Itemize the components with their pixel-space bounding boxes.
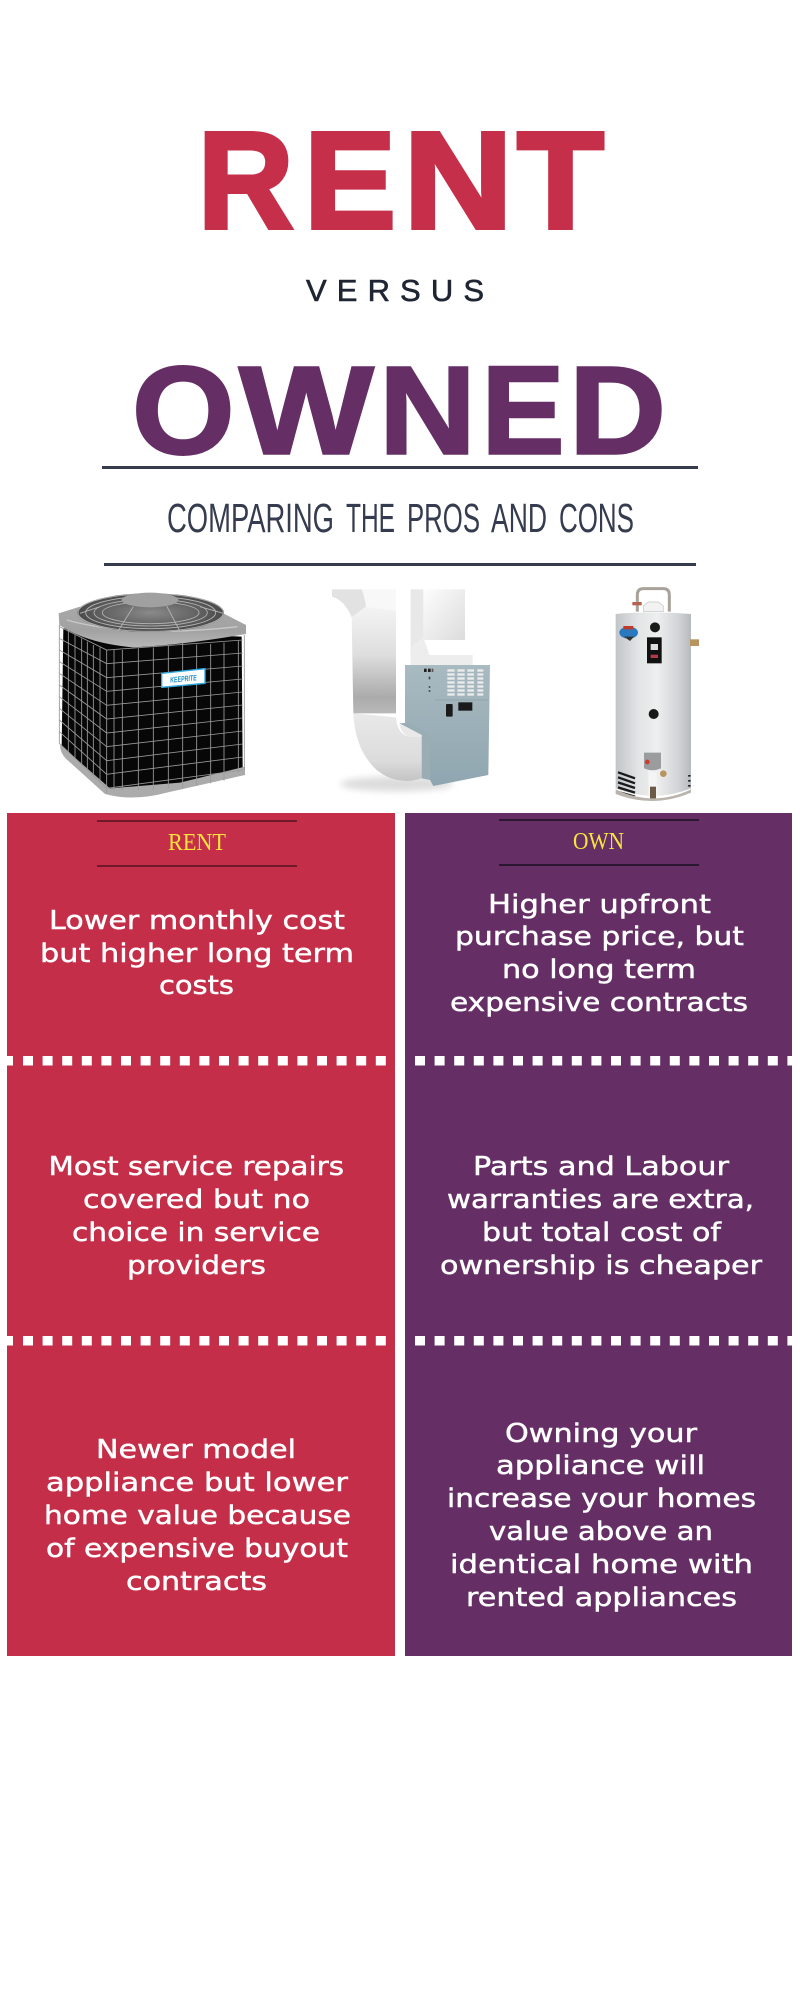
own point 1: no long term bbox=[502, 955, 696, 985]
own point 2: Parts and Labour bbox=[473, 1152, 729, 1182]
divider above subtitle bbox=[102, 466, 698, 469]
rent point 3: of expensive buyout bbox=[46, 1534, 348, 1564]
own point 3: identical home with bbox=[450, 1550, 753, 1580]
subtitle: THE bbox=[346, 495, 395, 541]
subtitle: COMPARING bbox=[167, 495, 334, 541]
title: OWNED: E bbox=[482, 342, 564, 480]
rent point 2: Most service repairs bbox=[48, 1152, 344, 1182]
image: water heater bbox=[616, 589, 699, 801]
own point 3: increase your homes bbox=[447, 1484, 756, 1514]
own point 1: purchase price, but bbox=[455, 922, 744, 952]
rent point 3: appliance but lower bbox=[46, 1468, 348, 1498]
own point 3: value above an bbox=[489, 1517, 713, 1547]
subtitle bbox=[167, 495, 634, 541]
rent point 3: home value because bbox=[44, 1501, 351, 1531]
own header rule top bbox=[499, 819, 699, 821]
own point 1: Higher upfront bbox=[488, 890, 711, 920]
panel: own bbox=[405, 813, 792, 1656]
title: OWNED: O bbox=[132, 342, 235, 480]
image: furnace with ductwork bbox=[332, 589, 490, 791]
rent header rule top bbox=[97, 820, 297, 822]
heading: VERSUS: VERSUS bbox=[306, 273, 484, 308]
rent point 2 bbox=[48, 1152, 344, 1281]
own point 2: but total cost of bbox=[482, 1218, 722, 1248]
own point 2 bbox=[440, 1152, 762, 1281]
own dashed separator 2 bbox=[415, 1336, 792, 1345]
rent point 1: Lower monthly cost bbox=[49, 906, 345, 936]
rent point 1: but higher long term bbox=[40, 939, 354, 969]
rent point 3: contracts bbox=[126, 1567, 267, 1597]
rent point 1 bbox=[40, 906, 354, 1001]
own label: OWN bbox=[573, 829, 624, 855]
own point 3 bbox=[447, 1419, 756, 1613]
rent label: RENT bbox=[168, 830, 226, 856]
rent point 2: covered but no bbox=[83, 1185, 310, 1215]
title: OWNED: D bbox=[569, 342, 666, 480]
rent point 2: choice in service bbox=[72, 1218, 320, 1248]
title: RENT: R bbox=[198, 104, 294, 258]
image: air conditioner unit bbox=[59, 593, 246, 798]
title: RENT: T bbox=[517, 104, 604, 258]
subtitle: PROS bbox=[407, 495, 480, 541]
rent point 1: costs bbox=[159, 971, 234, 1001]
own point 1: expensive contracts bbox=[450, 988, 748, 1018]
title: RENT: E bbox=[304, 104, 396, 258]
subtitle: AND bbox=[491, 495, 547, 541]
title: OWNED: N bbox=[379, 342, 476, 480]
panel: rent bbox=[7, 813, 395, 1656]
own point 1 bbox=[450, 890, 748, 1018]
own point 2: ownership is cheaper bbox=[440, 1251, 762, 1281]
subtitle: CONS bbox=[559, 495, 634, 541]
own point 2: warranties are extra, bbox=[447, 1185, 754, 1215]
title: OWNED bbox=[132, 342, 666, 480]
rent dashed separator 2 bbox=[7, 1336, 386, 1346]
own point 3: appliance will bbox=[496, 1451, 705, 1481]
title: OWNED: W bbox=[239, 342, 374, 480]
own header rule bottom bbox=[499, 864, 699, 866]
own point 3: Owning your bbox=[505, 1419, 697, 1449]
own point 3: rented appliances bbox=[466, 1583, 737, 1613]
rent point 2: providers bbox=[127, 1251, 266, 1281]
title: RENT bbox=[198, 104, 604, 258]
rent dashed separator 1 bbox=[7, 1056, 386, 1066]
own dashed separator 1 bbox=[415, 1056, 792, 1065]
rent point 3: Newer model bbox=[96, 1435, 296, 1465]
title: RENT: N bbox=[403, 104, 513, 258]
rent header rule bottom bbox=[97, 865, 297, 867]
rent point 3 bbox=[44, 1435, 351, 1597]
divider below subtitle bbox=[104, 563, 696, 566]
image: air conditioner unit: KEEPRITE bbox=[170, 673, 198, 685]
